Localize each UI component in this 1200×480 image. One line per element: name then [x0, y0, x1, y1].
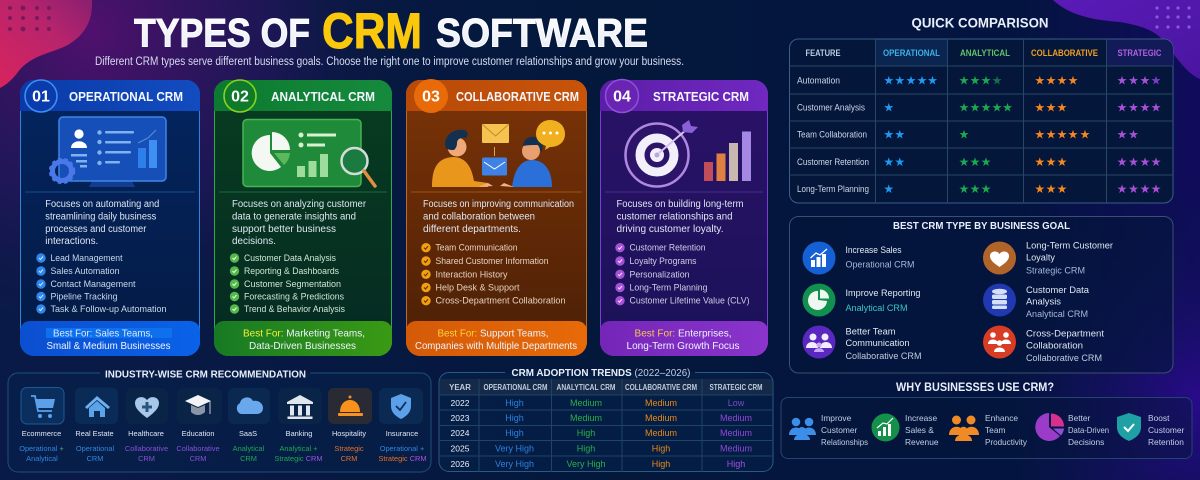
row labels: Team Collaboration	[797, 130, 867, 140]
table rows: Medium	[720, 444, 752, 454]
feature list: Team Communication	[436, 242, 518, 253]
table rows: High	[505, 413, 524, 423]
goal: better team communication	[802, 326, 922, 362]
number badge 04	[606, 80, 638, 112]
star ratings: ★★★★	[1117, 182, 1161, 196]
feature list: Long-Term Planning	[630, 282, 708, 292]
star ratings: ★★★	[959, 155, 991, 169]
feature list: Forecasting & Predictions	[244, 290, 344, 302]
panel: why businesses use CRM	[781, 398, 1192, 458]
feature list: Loyalty Programs	[630, 255, 697, 266]
recommended CRM per industry: Analytical	[26, 454, 58, 463]
table rows: Medium	[645, 413, 677, 423]
column headers: ANALYTICAL	[960, 48, 1010, 58]
description	[616, 199, 744, 235]
panel: best CRM by goal	[790, 216, 1173, 373]
table rows: Medium	[645, 428, 677, 438]
row labels	[797, 76, 869, 194]
star ratings: ★★	[1117, 128, 1139, 142]
number badge 02: 02	[231, 88, 249, 106]
best for: Long-Term Growth Focus	[626, 341, 740, 352]
reason: relationships	[789, 413, 868, 447]
panel: industry-wise recommendation	[8, 368, 431, 472]
table rows: 2023	[451, 413, 470, 423]
star ratings: ★★★★	[1034, 74, 1078, 88]
description: decisions.	[232, 236, 276, 247]
best for: Best For: Enterprises,	[634, 328, 732, 340]
best for	[243, 328, 365, 352]
star ratings: ★★★	[959, 74, 991, 88]
heading: BEST CRM TYPE BY BUSINESS GOAL	[893, 220, 1071, 232]
goal: better team communication: Communication	[846, 338, 910, 349]
star ratings: ★★★	[959, 182, 991, 196]
goal: improve reporting	[802, 284, 920, 316]
feature list: Pipeline Tracking	[50, 290, 118, 302]
best for	[46, 328, 172, 352]
best for	[626, 328, 740, 352]
feature list: Reporting & Dashboards	[244, 265, 339, 276]
goal: better team communication: Collaborative CRM	[846, 351, 922, 362]
table rows: Medium	[570, 413, 602, 423]
icon: cloud	[237, 397, 263, 414]
best for: Best For: Marketing Teams,	[243, 328, 365, 340]
goal: customer data analysis	[983, 284, 1090, 320]
star ratings: ★★★★★	[959, 100, 1013, 114]
industry labels: Insurance	[386, 429, 418, 438]
table rows: Medium	[645, 398, 677, 408]
column headers: YEAR	[449, 383, 471, 392]
recommended CRM per industry: CRM	[87, 454, 103, 463]
recommended CRM per industry	[19, 444, 427, 463]
star ratings: ★	[883, 182, 894, 196]
panel: comparison table	[790, 39, 1173, 203]
number badge 03	[414, 79, 448, 113]
goal: improve reporting: Improve Reporting	[846, 288, 920, 299]
feature list	[230, 252, 345, 314]
goal: better team communication: Better Team	[846, 326, 896, 338]
illustration: target with growth bars	[626, 120, 751, 186]
column headers: OPERATIONAL CRM	[484, 383, 548, 392]
goal: customer data analysis: Analytical CRM	[1026, 309, 1088, 320]
panel: adoption trends table	[439, 367, 773, 472]
recommended CRM per industry: CRM	[341, 454, 357, 463]
description	[423, 199, 574, 235]
title: TYPES OF	[134, 12, 310, 56]
recommended CRM per industry: Collaborative	[125, 444, 168, 453]
icon: cart	[31, 396, 55, 418]
reason: sales and revenue: Sales &	[905, 425, 934, 435]
table rows: Medium	[720, 428, 752, 438]
icon: analytics screen with magnifier	[243, 120, 375, 186]
heading: quick comparison: QUICK COMPARISON	[912, 14, 1048, 30]
goal: cross-department collaboration: Collaboration	[1026, 340, 1083, 352]
reason: customer retention: Retention	[1148, 437, 1184, 447]
reason: sales and revenue: Increase	[905, 413, 937, 423]
table rows: Low	[728, 398, 745, 408]
recommended CRM per industry: Strategic	[334, 444, 364, 453]
goal: increase sales: Operational CRM	[846, 260, 914, 270]
star ratings: ★★★	[1117, 74, 1150, 88]
column headers: STRATEGIC	[1118, 48, 1162, 58]
reason: customer retention	[1117, 413, 1185, 447]
best for: Data-Driven Businesses	[249, 341, 356, 352]
heading: STRATEGIC CRM	[653, 89, 749, 104]
industry labels: SaaS	[239, 429, 257, 438]
number badge 01: 01	[32, 88, 50, 106]
recommended CRM per industry: CRM	[138, 454, 155, 463]
table rows: High	[652, 459, 670, 469]
table rows: 2022	[451, 398, 470, 408]
star ratings: ★	[1151, 74, 1161, 88]
table rows: High	[505, 398, 524, 408]
feature list: Customer Data Analysis	[244, 252, 336, 263]
reason: customer retention: Boost	[1148, 413, 1170, 423]
recommended CRM per industry: Analytical	[233, 444, 265, 453]
feature list	[421, 242, 566, 306]
description: and collaboration between	[423, 212, 535, 222]
table rows: Very High	[566, 459, 606, 469]
icon: service bell	[338, 396, 363, 416]
table rows: Very High	[495, 444, 534, 454]
recommended CRM per industry: Operational +	[380, 444, 424, 453]
feature list	[615, 242, 750, 306]
column headers	[449, 383, 762, 392]
number badge 02	[224, 80, 256, 112]
table rows: High	[577, 428, 595, 438]
feature list: Personalization	[630, 268, 690, 279]
reason: team productivity	[949, 413, 1028, 447]
reason: relationships: Improve	[821, 413, 852, 423]
icon: house	[85, 396, 110, 417]
column headers: COLLABORATIVE CRM	[625, 383, 697, 392]
reason: data-driven decisions	[1035, 413, 1109, 447]
star ratings: ★★	[883, 155, 905, 169]
description: customer relationships and	[616, 212, 732, 222]
industry labels: Healthcare	[128, 429, 164, 438]
column headers: ANALYTICAL CRM	[556, 383, 616, 392]
goal: increase sales: Increase Sales	[846, 245, 902, 256]
goal: long-term loyalty: Loyalty	[1026, 252, 1055, 264]
panel: analytical CRM	[214, 80, 392, 356]
heading: why businesses use CRM: WHY BUSINESSES USE CRM?	[896, 382, 1054, 394]
description: streamlining daily business	[45, 212, 156, 222]
goal: customer data analysis: Customer Data	[1026, 285, 1090, 296]
reason: team productivity: Productivity	[985, 437, 1028, 447]
heading: CRM ADOPTION TRENDS (2022–2026)	[512, 367, 690, 379]
goal: increase sales	[802, 242, 914, 274]
goal: improve reporting: Analytical CRM	[846, 303, 908, 314]
table rows: 2025	[451, 444, 470, 454]
row labels: Customer Analysis	[797, 102, 865, 112]
title	[134, 3, 648, 59]
feature list: Cross-Department Collaboration	[436, 295, 566, 306]
description: Focuses on building long-term	[616, 199, 744, 210]
reason: relationships: Customer	[821, 425, 858, 435]
recommended CRM per industry: Operational	[76, 444, 114, 453]
goal: cross-department collaboration: Cross-Department	[1026, 328, 1104, 340]
icon: monitor with gear	[50, 117, 166, 187]
star ratings: ★★★★	[1117, 100, 1161, 114]
best for: Best For: Support Teams,	[438, 328, 548, 340]
best for: Best For: Sales Teams,	[53, 328, 153, 340]
heading: ANALYTICAL CRM	[271, 89, 375, 104]
title: CRM	[322, 3, 422, 59]
subtitle: Different CRM types serve different business goals. Choose the right one to improve customer relationships and grow your business.	[95, 56, 684, 68]
icon: bank	[287, 395, 313, 419]
recommended CRM per industry: CRM	[240, 454, 257, 463]
column headers: COLLABORATIVE	[1031, 48, 1098, 58]
feature list: Contact Management	[50, 278, 136, 289]
column headers: STRATEGIC CRM	[710, 383, 762, 392]
number badge 03: 03	[422, 88, 440, 106]
heading: INDUSTRY-WISE CRM RECOMMENDATION	[105, 368, 306, 380]
panel: collaborative CRM	[406, 79, 587, 356]
reason: team productivity: Team	[985, 425, 1006, 435]
star ratings: ★★★	[1034, 155, 1067, 169]
table rows: High	[727, 459, 745, 469]
industry labels: Ecommerce	[22, 429, 61, 438]
heading: OPERATIONAL CRM	[69, 89, 183, 104]
panel: operational CRM	[20, 80, 200, 356]
feature list: Customer Lifetime Value (CLV)	[630, 295, 750, 306]
star ratings	[883, 74, 1161, 196]
description: interactions.	[45, 236, 98, 247]
reason: sales and revenue	[872, 413, 939, 447]
star ratings: ★★	[883, 128, 905, 142]
table rows: Medium	[570, 398, 602, 408]
table rows: 2024	[451, 428, 470, 438]
icon: shield with check	[391, 394, 411, 419]
reason: customer retention: Customer	[1148, 425, 1185, 435]
best for: Companies with Multiple Departments	[415, 341, 577, 352]
table rows: 2026	[451, 459, 470, 469]
industry labels: Education	[182, 429, 214, 438]
goal: long-term loyalty: Long-Term Customer	[1026, 240, 1114, 252]
decorative purple blob	[1053, 0, 1200, 79]
feature list: Trend & Behavior Analysis	[244, 303, 345, 314]
goal: cross-department collaboration	[983, 326, 1104, 364]
reason: data-driven decisions: Data-Driven	[1068, 425, 1109, 435]
star ratings: ★★★★	[1117, 155, 1161, 169]
star ratings: ★★★	[1034, 100, 1067, 114]
reason: data-driven decisions: Decisions	[1068, 437, 1104, 447]
feature list: Customer Retention	[630, 242, 706, 253]
description: processes and customer	[45, 224, 147, 235]
feature list	[36, 252, 166, 314]
recommended CRM per industry: Collaborative	[176, 444, 220, 453]
description: data to generate insights and	[232, 212, 356, 222]
column headers: FEATURE	[806, 48, 840, 58]
row labels: Long-Term Planning	[797, 184, 869, 194]
recommended CRM per industry: CRM	[190, 454, 206, 463]
industry labels: Banking	[286, 429, 312, 438]
table rows: High	[577, 444, 595, 454]
feature list: Interaction History	[436, 268, 508, 279]
star ratings: ★★★★★	[1034, 128, 1090, 142]
industry labels: Real Estate	[75, 429, 114, 438]
row labels: Automation	[797, 76, 840, 86]
star ratings: ★	[992, 74, 1002, 88]
icon: graduation cap	[185, 395, 211, 415]
feature list: Lead Management	[50, 252, 123, 263]
goal: long-term loyalty	[983, 240, 1114, 276]
description	[45, 199, 159, 247]
reason: data-driven decisions: Better	[1068, 413, 1091, 423]
table rows	[451, 398, 752, 469]
table rows: High	[505, 428, 524, 438]
industry labels	[22, 429, 418, 438]
title: SOFTWARE	[436, 12, 648, 56]
best for	[415, 328, 577, 352]
industry labels: Hospitality	[332, 429, 366, 438]
table rows: Very High	[495, 459, 534, 469]
feature list: Task & Follow-up Automation	[50, 303, 166, 314]
star ratings: ★	[883, 100, 894, 114]
panel: strategic CRM	[600, 80, 768, 356]
reason: relationships: Relationships	[821, 437, 868, 447]
feature list: Shared Customer Information	[436, 255, 548, 266]
feature list: Customer Segmentation	[244, 278, 341, 289]
goal: long-term loyalty: Strategic CRM	[1026, 266, 1085, 276]
table rows: Medium	[720, 413, 752, 423]
best for: Small & Medium Businesses	[46, 341, 170, 352]
icon tiles	[21, 388, 423, 424]
description: Focuses on improving communication	[423, 199, 574, 210]
goal: cross-department collaboration: Collaborative CRM	[1026, 353, 1102, 364]
heading: COLLABORATIVE CRM	[456, 89, 579, 104]
description: Focuses on analyzing customer	[232, 199, 367, 210]
recommended CRM per industry: Strategic CRM	[378, 454, 427, 463]
description: driving customer loyalty.	[616, 224, 724, 235]
description: different departments.	[423, 224, 521, 235]
feature list: Help Desk & Support	[436, 282, 520, 292]
star ratings: ★	[959, 128, 969, 142]
goal: customer data analysis: Analysis	[1026, 296, 1061, 308]
number badge 01	[25, 80, 57, 112]
decorative pink blob	[0, 0, 92, 88]
star ratings: ★★★	[1034, 182, 1067, 196]
star ratings: ★★★★★	[883, 74, 938, 88]
illustration: two people exchanging messages	[432, 120, 565, 187]
description	[232, 199, 367, 247]
icon: heart with plus	[135, 397, 159, 418]
row labels: Customer Retention	[797, 157, 869, 167]
reason: team productivity: Enhance	[985, 413, 1018, 423]
recommended CRM per industry: Strategic CRM	[274, 454, 323, 463]
description: Focuses on automating and	[45, 199, 159, 210]
column headers: OPERATIONAL	[883, 48, 940, 58]
description: support better business	[232, 224, 336, 235]
feature list: Sales Automation	[50, 265, 120, 276]
recommended CRM per industry: Operational +	[19, 444, 64, 453]
recommended CRM per industry: Analytical +	[280, 444, 318, 453]
column headers	[806, 48, 1162, 58]
reason: sales and revenue: Revenue	[905, 437, 939, 447]
number badge 04: 04	[613, 88, 631, 106]
table rows: High	[652, 444, 670, 454]
